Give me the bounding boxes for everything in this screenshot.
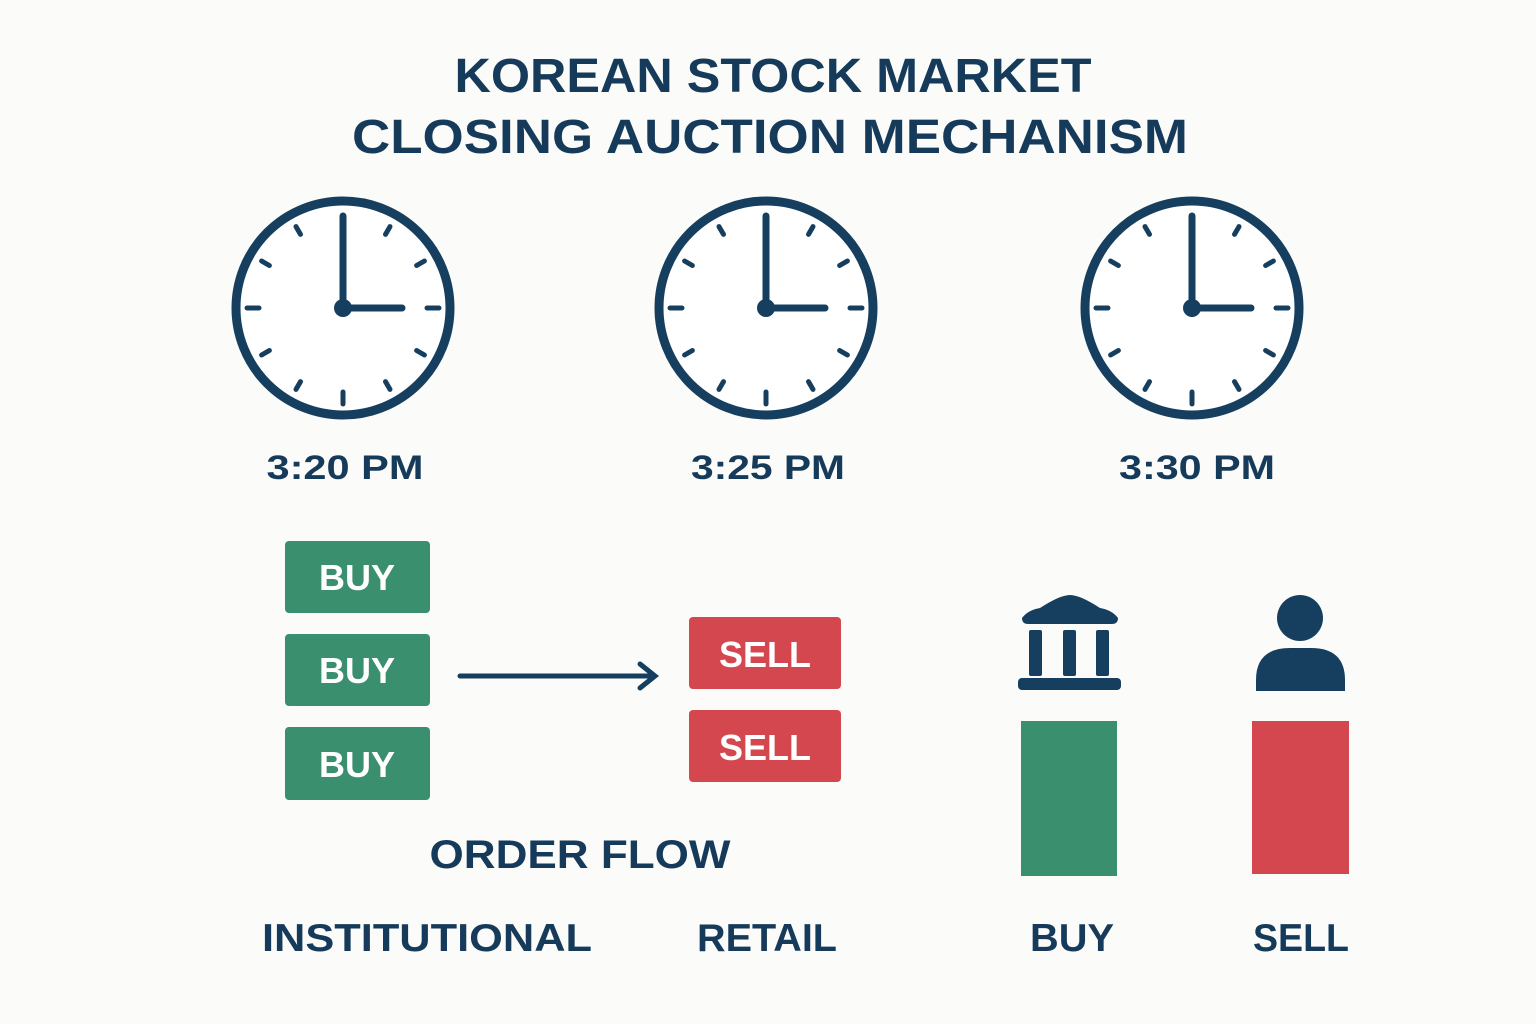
sell orders: SELL — [719, 634, 811, 675]
bar: buy — [1021, 721, 1117, 876]
buy orders: BUY — [319, 650, 395, 691]
clock: 3:30 — [1085, 201, 1299, 415]
buy orders: BUY — [319, 557, 395, 598]
bottom labels — [262, 917, 1349, 960]
buy orders: BUY — [319, 744, 395, 785]
clock: 3:20 — [236, 201, 450, 415]
title — [352, 50, 1188, 164]
title: CLOSING AUCTION MECHANISM — [352, 111, 1188, 164]
icon: institution — [1018, 595, 1121, 690]
sell orders — [689, 617, 841, 782]
order flow label: ORDER FLOW — [430, 833, 731, 877]
arrow — [460, 664, 655, 688]
icon: person — [1256, 595, 1345, 691]
bar: sell — [1252, 721, 1349, 874]
bottom labels: SELL — [1253, 917, 1349, 960]
buy orders — [285, 541, 430, 800]
time labels: 3:30 PM — [1119, 449, 1275, 487]
bottom labels: BUY — [1030, 917, 1114, 960]
title: KOREAN STOCK MARKET — [454, 50, 1092, 103]
time labels — [266, 449, 1275, 487]
bottom labels: RETAIL — [697, 917, 837, 960]
time labels: 3:25 PM — [691, 449, 845, 487]
clock: 3:25 — [659, 201, 873, 415]
time labels: 3:20 PM — [266, 449, 424, 487]
bottom labels: INSTITUTIONAL — [262, 917, 592, 960]
sell orders: SELL — [719, 727, 811, 768]
